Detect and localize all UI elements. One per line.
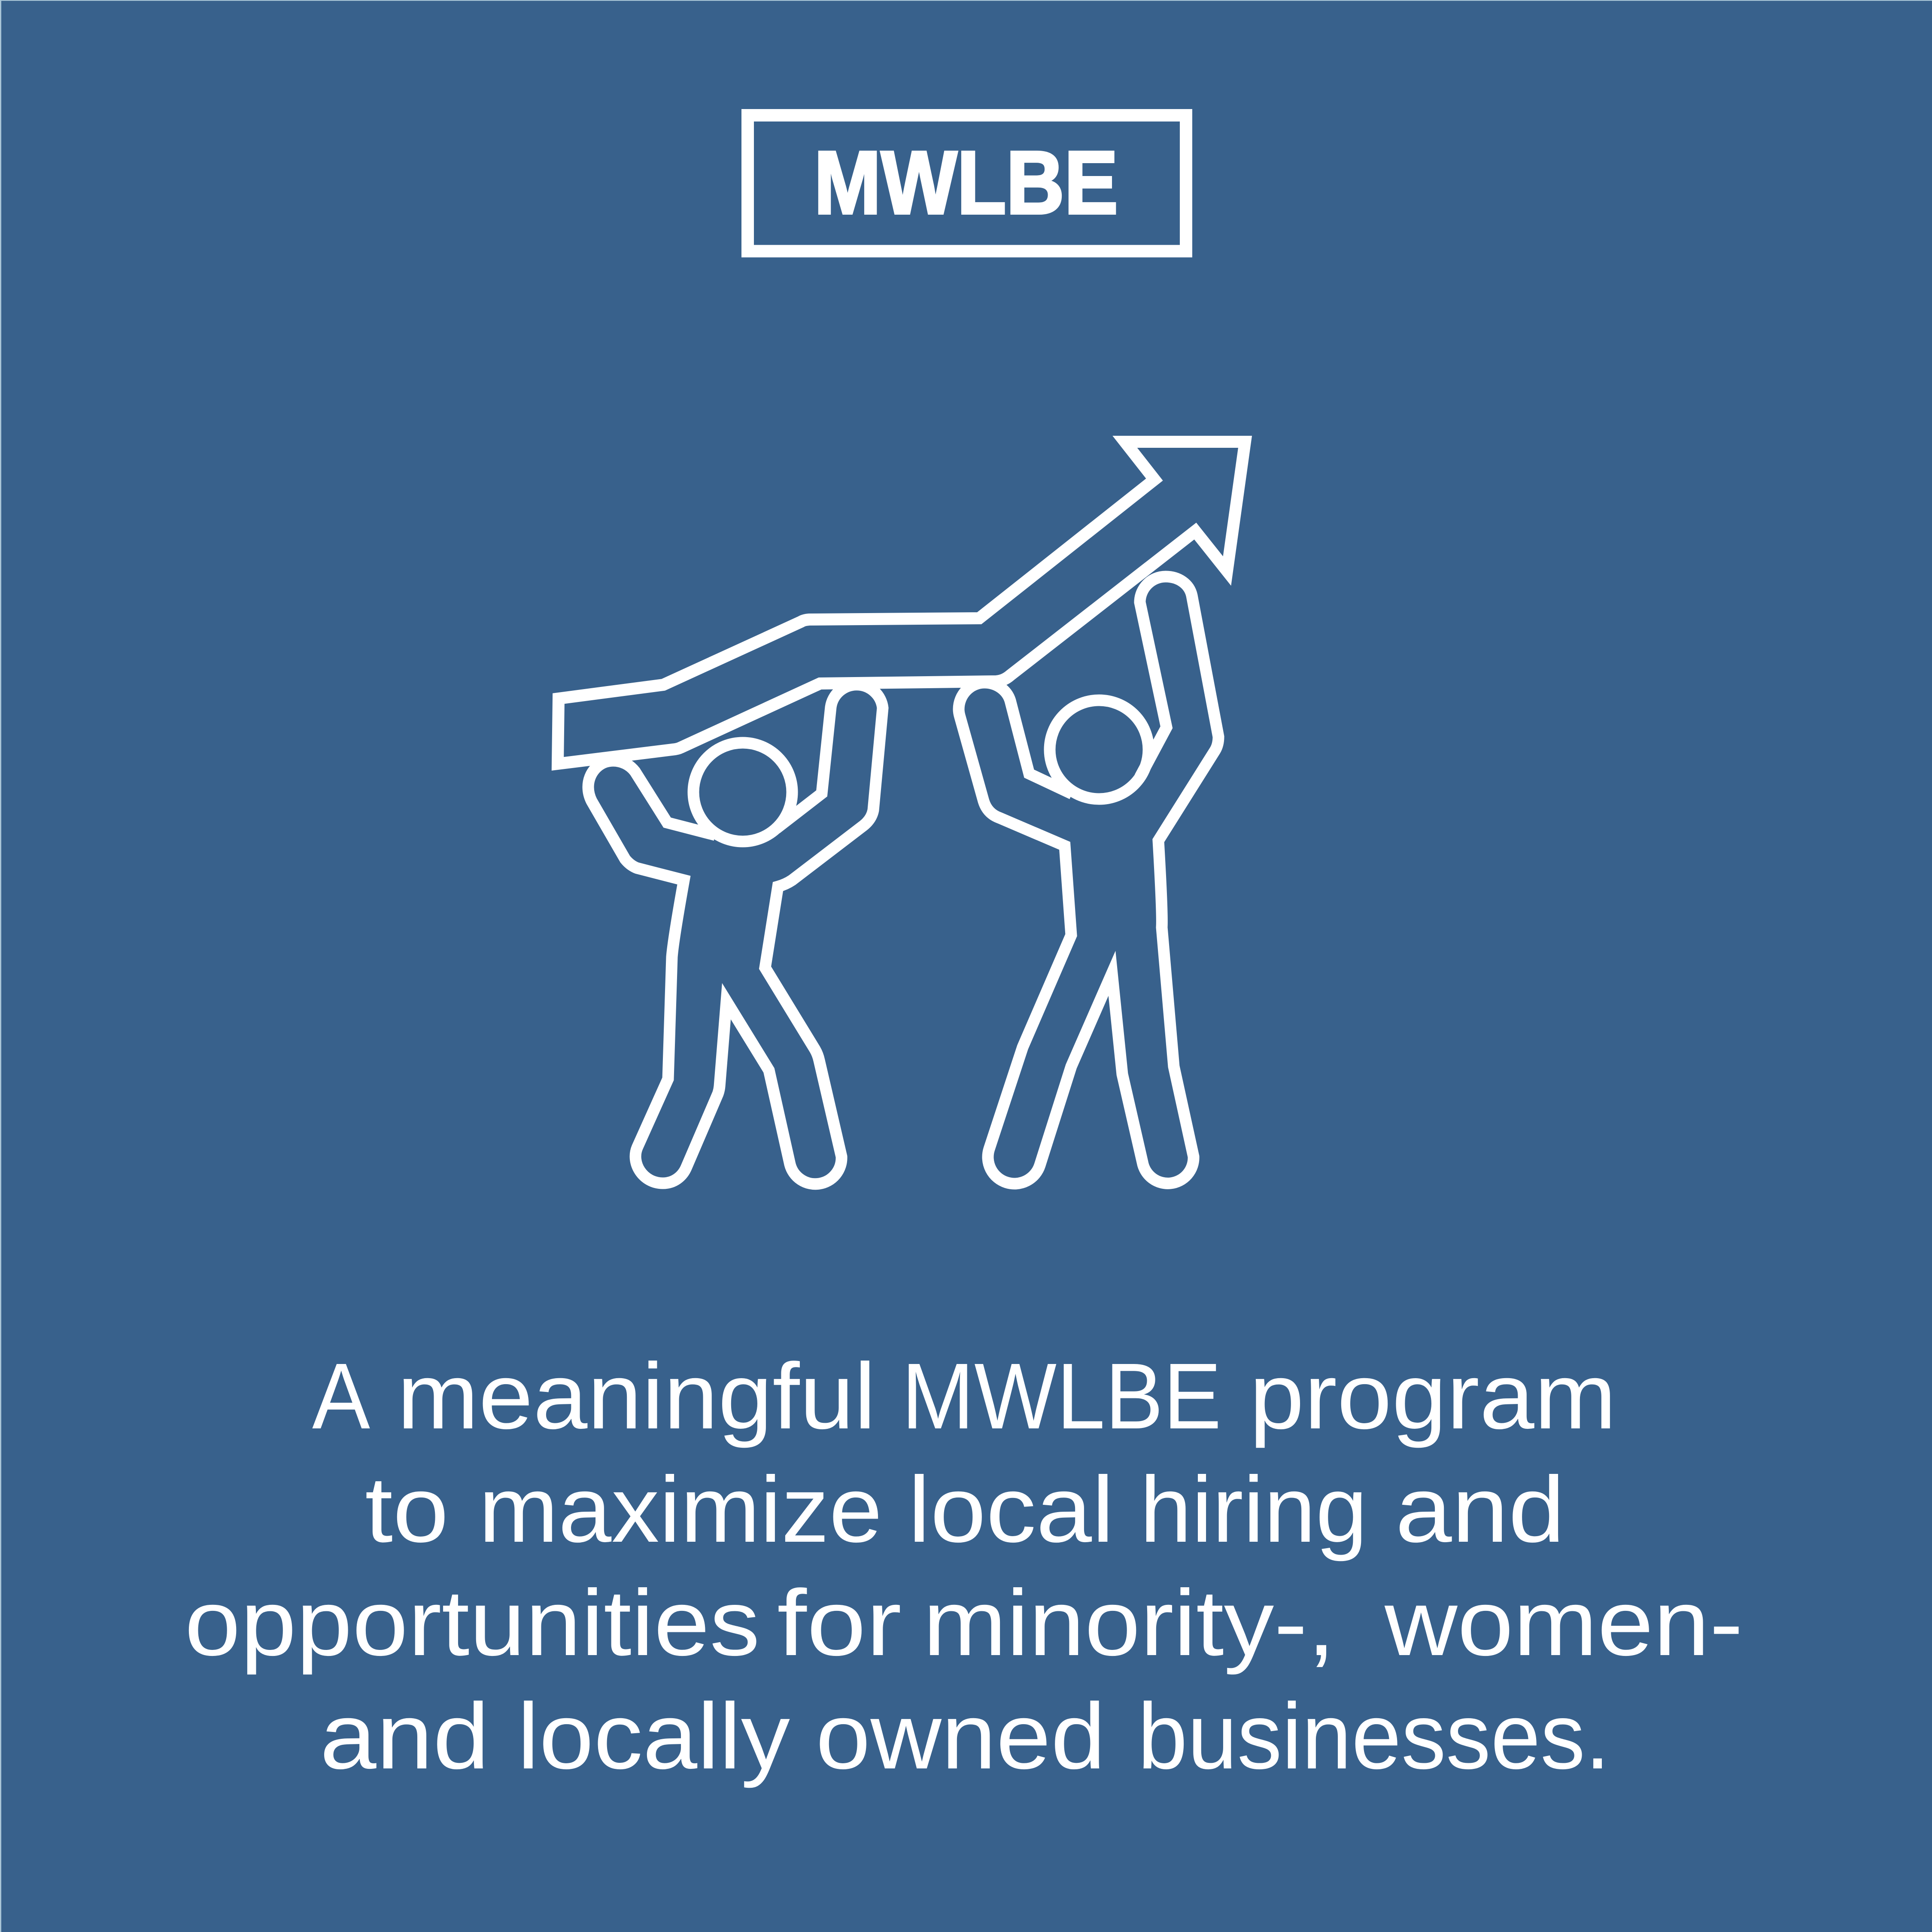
icon: two figures lifting a rising arrow — [558, 442, 1245, 1184]
icon: right figure head — [1050, 700, 1148, 799]
text block: program description: and — [1395, 1458, 1565, 1562]
icon: right figure body — [959, 577, 1218, 1184]
text block: program description: for — [777, 1571, 902, 1675]
text block: program description: meaningful — [397, 1344, 876, 1449]
icon: rising arrow — [558, 442, 1245, 764]
text block: program description: locally — [517, 1684, 790, 1789]
text block: program description: A — [312, 1344, 370, 1449]
text block: program description: program — [1249, 1344, 1616, 1449]
text block: program description: MWLBE — [902, 1344, 1221, 1449]
text block: program description: minority-, — [923, 1571, 1335, 1675]
text block: program description: to — [365, 1458, 449, 1562]
text block: program description: local — [908, 1458, 1114, 1562]
text block: program description: women- — [1384, 1571, 1743, 1675]
text block: program description: opportunities — [185, 1571, 760, 1675]
text block: program description — [185, 1344, 1743, 1789]
icon: left figure head — [693, 743, 792, 841]
icon: left figure body — [588, 685, 883, 1184]
text block: program description: maximize — [479, 1458, 882, 1562]
text block: program description: businesses. — [1138, 1684, 1610, 1789]
text block: program description: owned — [816, 1684, 1106, 1789]
text block: program description: hiring — [1140, 1458, 1367, 1562]
text block: program description: and — [320, 1684, 489, 1789]
title badge: MWLBE: MWLBE — [814, 133, 1118, 233]
title badge: MWLBE — [748, 115, 1186, 251]
